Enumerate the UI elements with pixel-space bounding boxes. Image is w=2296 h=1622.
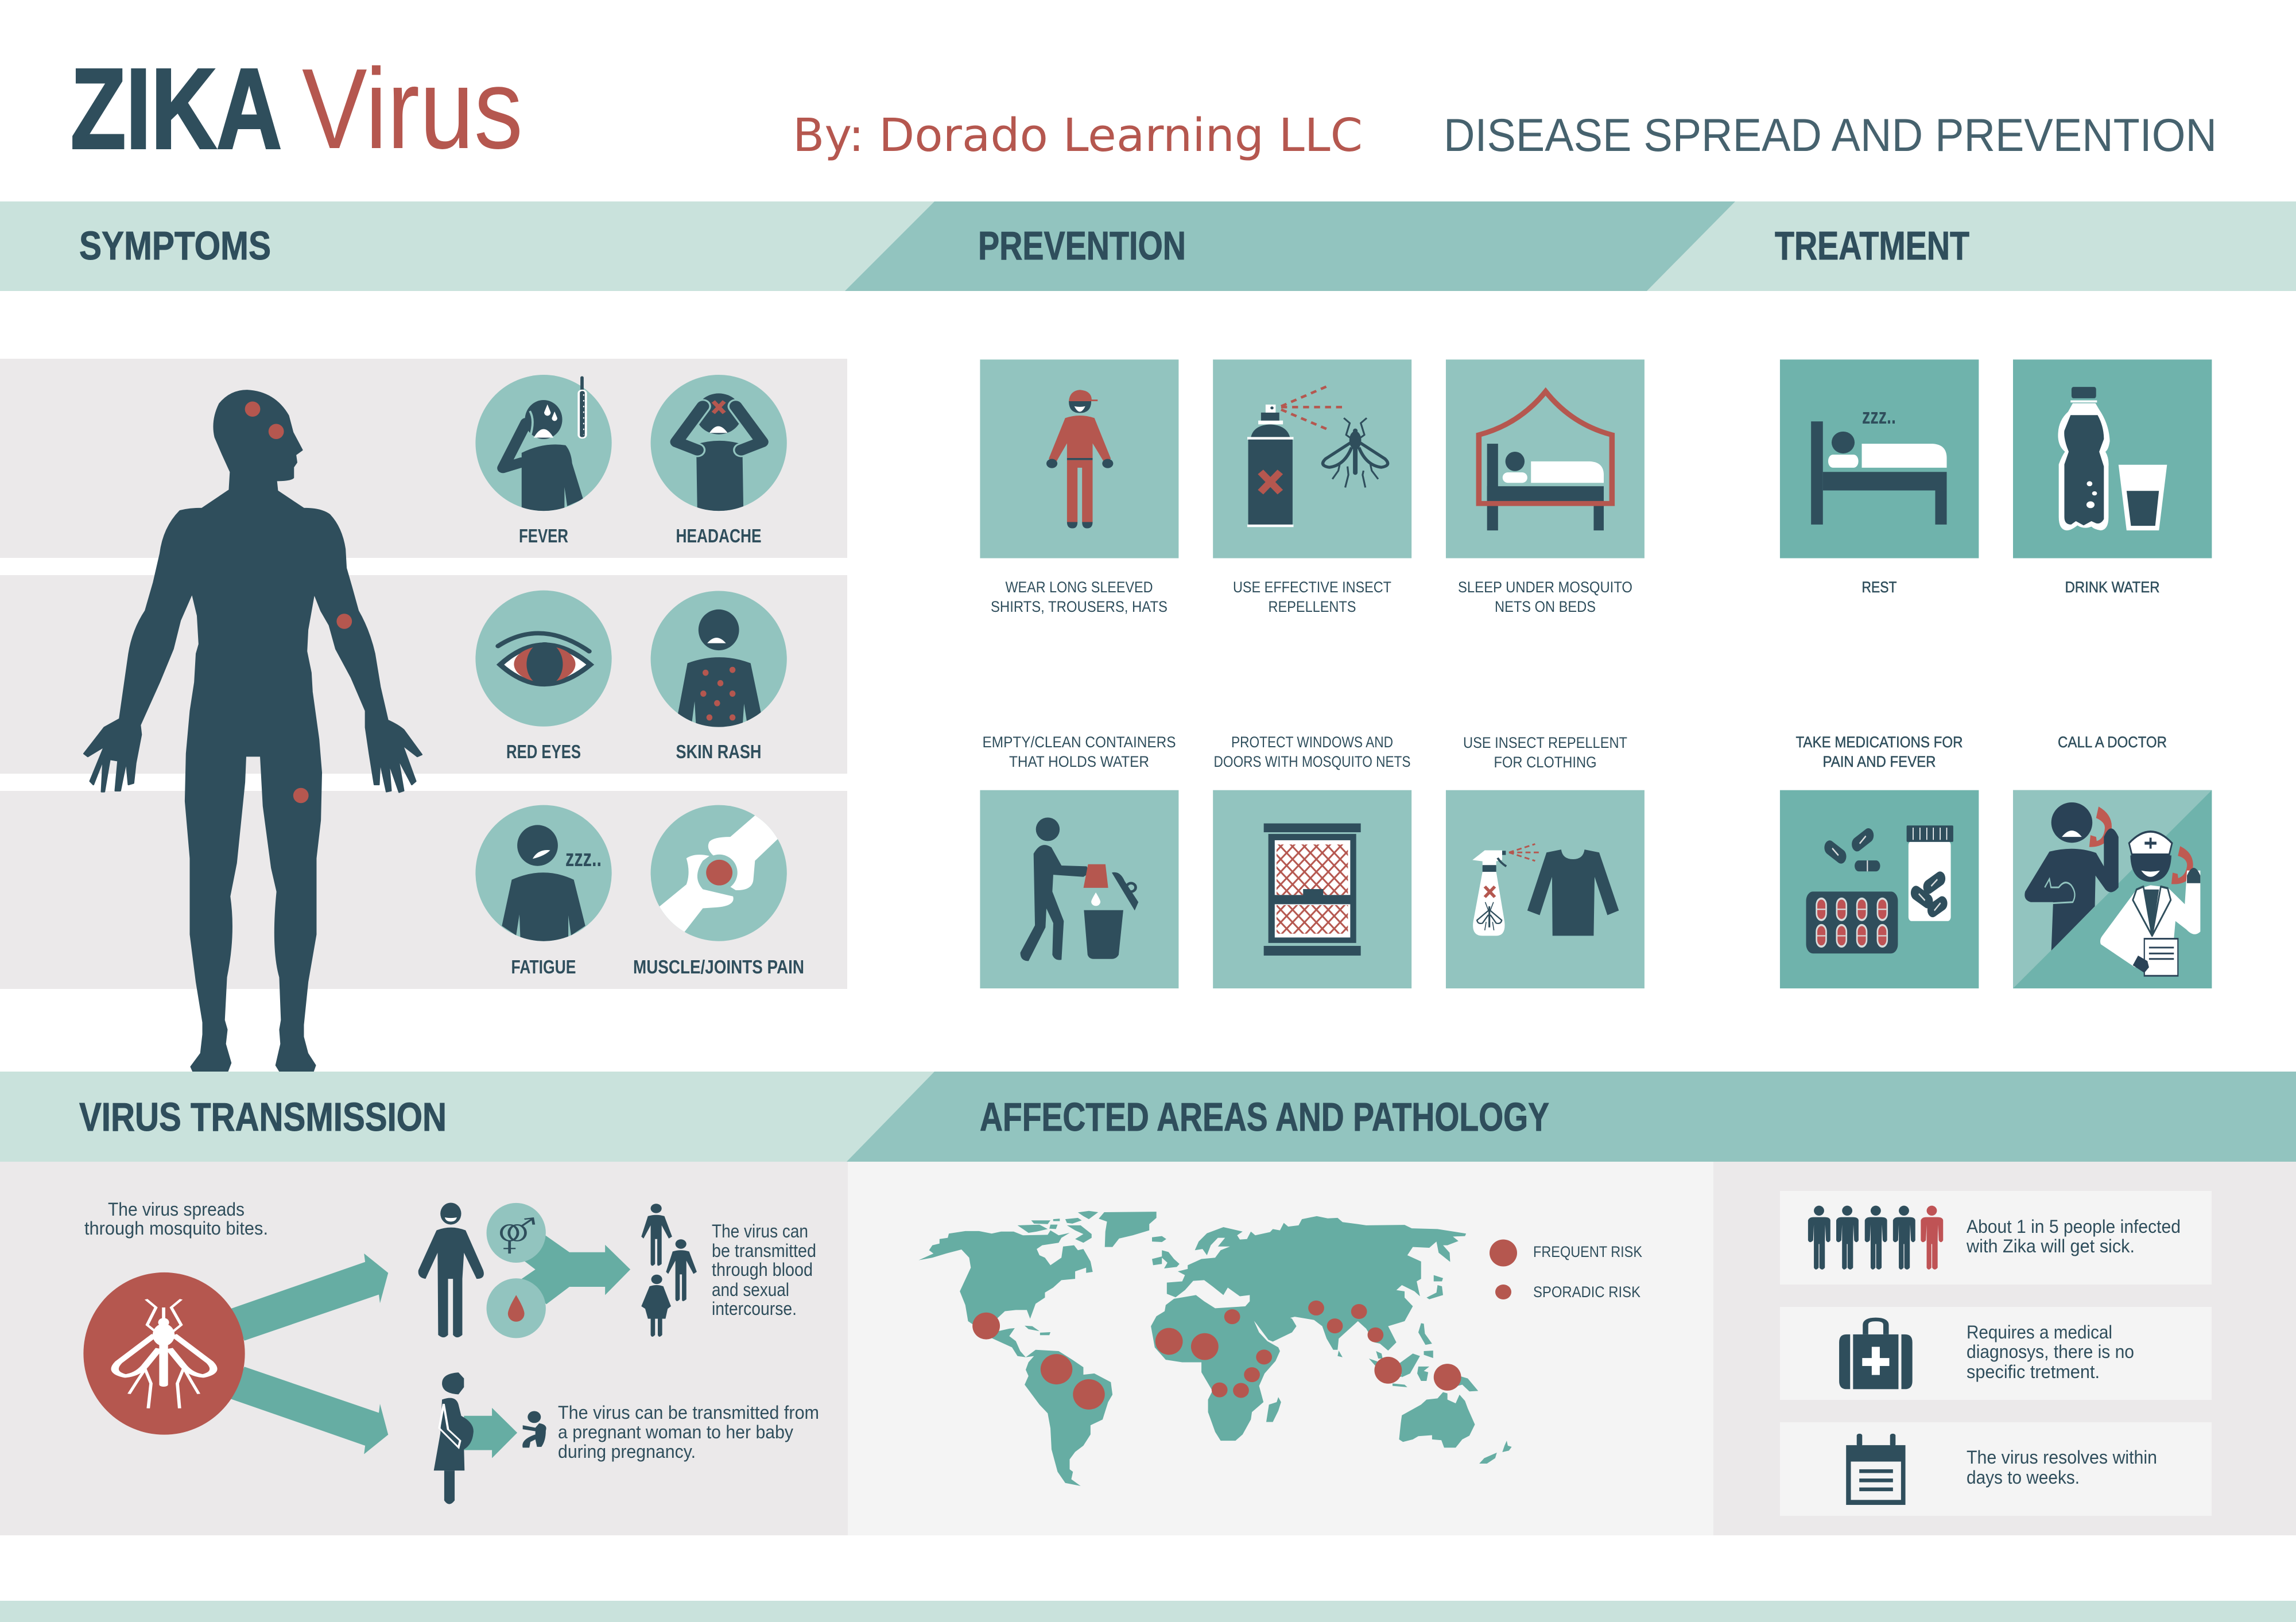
transmission diagram <box>83 1202 697 1504</box>
caption: use repellents <box>1233 579 1391 615</box>
tile: drink water <box>2013 359 2212 558</box>
sporadic risk markers <box>1212 1301 1383 1398</box>
icon: person infected <box>418 1202 484 1337</box>
header band: symptoms prevention treatment <box>0 201 2296 291</box>
caption: wear long sleeved: WEAR LONG SLEEVED <box>1006 579 1153 596</box>
text: pregnancy transmission: The virus can be transmitted from <box>558 1402 819 1423</box>
caption: repellent for clothing: USE INSECT REPELLENT <box>1463 734 1627 751</box>
fact card: medical diagnosis <box>1780 1307 2212 1400</box>
caption: repellent for clothing <box>1463 734 1627 771</box>
caption: empty containers: EMPTY/CLEAN CONTAINERS <box>983 734 1176 751</box>
text: blood and sexual transmission <box>712 1221 816 1319</box>
rest sleep letters: zzz.. <box>1862 405 1896 429</box>
label: fatigue: FATIGUE <box>511 956 576 977</box>
label: red eyes: RED EYES <box>506 741 581 762</box>
label: fever: FEVER <box>519 525 568 546</box>
author byline: By: Dorado Learning LLC <box>793 109 1363 162</box>
text: pregnancy transmission <box>558 1402 819 1462</box>
text: blood and sexual transmission: and sexual <box>712 1279 789 1300</box>
text: blood and sexual transmission: through blood <box>712 1259 813 1280</box>
human body figure with infection spots <box>84 390 422 1072</box>
text: mosquito bites <box>84 1199 268 1239</box>
title <box>71 45 523 173</box>
label: muscle and joints pain: MUSCLE/JOINTS PAIN <box>633 956 804 977</box>
title: Virus <box>302 45 523 173</box>
panel: virus transmission <box>0 1162 848 1535</box>
panel: symptoms <box>0 359 847 1072</box>
header band: symptoms prevention treatment: PREVENTION <box>978 223 1186 268</box>
icon: sexual transmission <box>487 1203 546 1263</box>
arrow: onward transmission <box>522 1234 630 1304</box>
caption: wear long sleeved: SHIRTS, TROUSERS, HATS <box>991 598 1168 615</box>
tile: clothing spray <box>1446 790 1645 988</box>
caption: sleep under nets <box>1458 579 1632 615</box>
arrow: to pregnancy transmission <box>231 1367 388 1454</box>
frequent risk markers <box>972 1313 1461 1410</box>
fact card: resolves within days: The virus resolves within <box>1967 1447 2157 1468</box>
caption: empty containers <box>983 734 1176 770</box>
text: mosquito bites: The virus spreads <box>108 1199 245 1220</box>
legend: risk levels: SPORADIC RISK <box>1533 1283 1640 1301</box>
legend: risk levels: FREQUENT RISK <box>1533 1243 1642 1260</box>
icon: medical kit <box>1839 1320 1913 1389</box>
patient <box>2024 802 2119 950</box>
doctor <box>2100 832 2200 976</box>
title: ZIKA <box>71 45 282 173</box>
fact card: 1 in 5 get sick: About 1 in 5 people infected <box>1967 1216 2181 1237</box>
header band: transmission and affected areas: AFFECTED AREAS AND PATHOLOGY <box>980 1095 1549 1139</box>
text: mosquito bites: through mosquito bites. <box>84 1218 268 1239</box>
fact card: medical diagnosis: diagnosys, there is no <box>1967 1341 2134 1362</box>
tile: long sleeved clothing <box>980 359 1178 558</box>
subtitle: DISEASE SPREAD AND PREVENTION <box>1444 110 2217 161</box>
icon: fatigue <box>475 805 612 944</box>
caption: protect windows <box>1213 734 1411 770</box>
icon: calendar <box>1846 1434 1906 1505</box>
caption: protect windows: PROTECT WINDOWS AND <box>1231 734 1393 751</box>
panel: pathology facts <box>1713 1162 2296 1535</box>
panel: prevention <box>980 359 1645 988</box>
icon: muscle and joint pain <box>651 805 787 941</box>
text: blood and sexual transmission: intercourse. <box>712 1298 797 1319</box>
caption: use repellents: USE EFFECTIVE INSECT <box>1233 579 1391 596</box>
tile: empty containers <box>980 790 1178 988</box>
header band: symptoms prevention treatment: TREATMENT <box>1775 223 1969 268</box>
header band: transmission and affected areas: VIRUS TRANSMISSION <box>79 1095 447 1139</box>
fatigue sleep letters: zzz.. <box>565 844 602 871</box>
text: blood and sexual transmission: The virus can <box>712 1221 808 1241</box>
tile: window mesh <box>1213 790 1411 988</box>
tile: mosquito net over bed <box>1446 359 1645 558</box>
label: headache: HEADACHE <box>676 525 761 546</box>
tile: call a doctor <box>2013 790 2212 988</box>
caption: sleep under nets: SLEEP UNDER MOSQUITO <box>1458 579 1632 596</box>
fact card: medical diagnosis: Requires a medical <box>1967 1322 2112 1342</box>
caption: take medications: PAIN AND FEVER <box>1823 753 1936 770</box>
icon: headache <box>651 375 787 513</box>
caption: use repellents: REPELLENTS <box>1269 598 1356 615</box>
caption: protect windows: DOORS WITH MOSQUITO NETS <box>1213 753 1411 770</box>
icon: fever <box>475 375 612 513</box>
icon: baby <box>522 1411 546 1448</box>
tile: rest <box>1780 359 1979 558</box>
panel: affected areas <box>848 1162 1713 1535</box>
caption: call a doctor: CALL A DOCTOR <box>2058 734 2167 751</box>
world map with risk markers <box>918 1211 1512 1486</box>
tile: medications <box>1780 790 1979 988</box>
icon: red eyes <box>475 591 612 727</box>
header band: symptoms prevention treatment: SYMPTOMS <box>79 223 271 268</box>
label: skin rash: SKIN RASH <box>676 741 761 762</box>
fact card: 1 in 5 get sick: with Zika will get sick. <box>1966 1236 2135 1256</box>
icon: mosquito badge <box>83 1272 245 1435</box>
icon: blood transmission <box>487 1278 546 1338</box>
caption: wear long sleeved <box>991 579 1168 615</box>
caption: drink water: DRINK WATER <box>2065 579 2159 596</box>
fact card: medical diagnosis: specific tretment. <box>1967 1361 2100 1382</box>
caption: rest: REST <box>1862 579 1896 596</box>
icon: pregnant woman <box>434 1372 474 1504</box>
caption: repellent for clothing: FOR CLOTHING <box>1494 754 1597 771</box>
icon: family <box>641 1204 697 1337</box>
fact card: resolves within days: days to weeks. <box>1967 1467 2080 1488</box>
header band: transmission and affected areas <box>0 1072 2296 1162</box>
caption: empty containers: THAT HOLDS WATER <box>1009 753 1149 770</box>
arrow: to sexual and blood transmission <box>231 1254 388 1341</box>
fact card: 1 in 5 get sick <box>1780 1191 2212 1285</box>
icon: five people <box>1808 1206 1943 1270</box>
tile: insect repellent spray <box>1213 359 1411 558</box>
footer band <box>0 1601 2296 1622</box>
text: blood and sexual transmission: be transmitted <box>712 1240 816 1261</box>
legend: risk levels <box>1490 1240 1642 1301</box>
caption: take medications <box>1795 734 1963 770</box>
panel: treatment <box>1780 359 2212 988</box>
text: pregnancy transmission: a pregnant woman to her baby <box>558 1422 793 1442</box>
fact card: resolves within days <box>1780 1422 2212 1516</box>
caption: take medications: TAKE MEDICATIONS FOR <box>1795 734 1963 751</box>
arrow: mother to baby <box>464 1408 517 1458</box>
caption: sleep under nets: NETS ON BEDS <box>1495 598 1596 615</box>
icon: skin rash <box>651 591 787 730</box>
text: pregnancy transmission: during pregnancy. <box>558 1441 696 1462</box>
